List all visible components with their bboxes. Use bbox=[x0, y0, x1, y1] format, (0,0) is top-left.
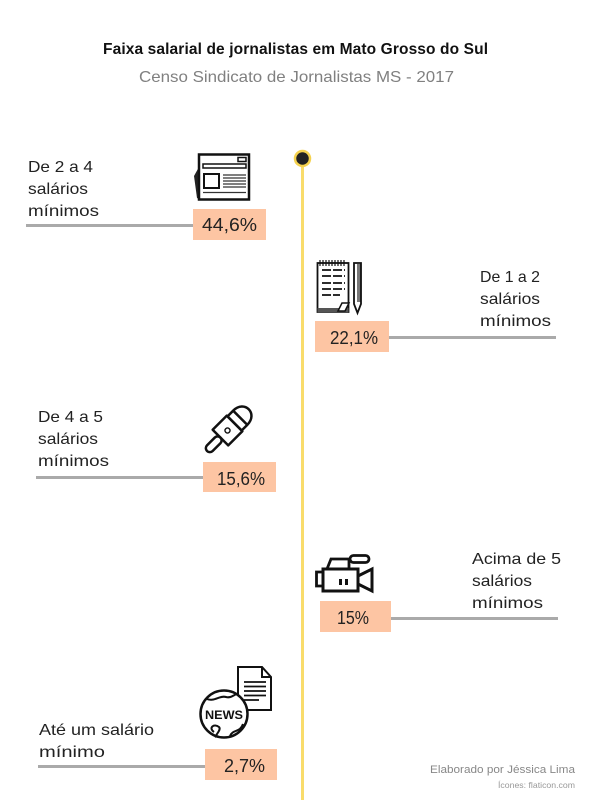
label: De 2 a 4 bbox=[28, 159, 93, 176]
value: 2,7% bbox=[224, 756, 265, 776]
label: mínimos bbox=[480, 313, 551, 330]
icon: news globe bbox=[200, 690, 248, 738]
label: salários bbox=[28, 181, 88, 198]
label: Acima de 5 bbox=[472, 551, 561, 568]
subtitle: Censo Sindicato de Jornalistas MS - 2017 bbox=[139, 69, 454, 86]
connector bar bbox=[390, 617, 558, 620]
value: 22,1% bbox=[330, 328, 378, 348]
item: Até um salário mínimo bbox=[38, 667, 277, 780]
item: Acima de 5 salários mínimos bbox=[316, 551, 561, 632]
timeline axis bbox=[295, 151, 310, 800]
label: De 4 a 5 bbox=[38, 409, 103, 426]
value tag bbox=[203, 462, 276, 492]
title: Faixa salarial de jornalistas em Mato Grosso do Sul bbox=[103, 41, 488, 58]
label: mínimos bbox=[28, 203, 99, 220]
connector bar bbox=[388, 336, 556, 339]
label: mínimo bbox=[39, 744, 105, 761]
label: salários bbox=[480, 291, 540, 308]
label: De 1 a 2 bbox=[480, 269, 540, 286]
connector bar bbox=[38, 765, 206, 768]
credit: author: Elaborado por Jéssica Lima bbox=[430, 764, 576, 776]
item: De 1 a 2 salários mínimos bbox=[315, 260, 556, 352]
value tag bbox=[320, 601, 391, 632]
label: salários bbox=[38, 431, 98, 448]
credit: icons: Ícones: flaticon.com bbox=[498, 780, 575, 790]
icon: microphone bbox=[199, 402, 256, 459]
label: salários bbox=[472, 573, 532, 590]
connector bar bbox=[26, 224, 194, 227]
item: De 4 a 5 salários mínimos bbox=[36, 402, 276, 492]
icon: news globe: NEWS bbox=[205, 710, 243, 722]
icon: newspaper bbox=[194, 154, 249, 200]
value tag bbox=[315, 321, 389, 352]
value tag bbox=[205, 749, 277, 780]
item: De 2 a 4 salários mínimos bbox=[26, 154, 266, 240]
label: mínimos bbox=[38, 453, 109, 470]
icon: document bbox=[238, 667, 271, 710]
value: 15,6% bbox=[217, 469, 265, 489]
icon: video camera bbox=[316, 556, 372, 591]
label: mínimos bbox=[472, 595, 543, 612]
value: 44,6% bbox=[202, 215, 257, 235]
label: Até um salário bbox=[39, 722, 154, 739]
connector bar bbox=[36, 476, 204, 479]
value tag bbox=[193, 209, 266, 240]
value: 15% bbox=[337, 608, 369, 628]
icon: notepad and pen bbox=[318, 260, 361, 313]
